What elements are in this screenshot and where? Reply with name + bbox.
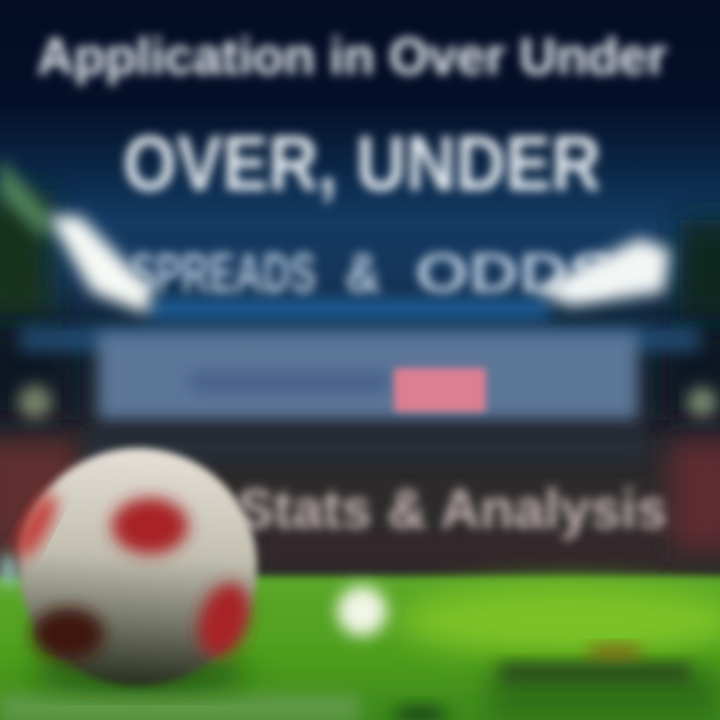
- small white ball: [337, 586, 387, 636]
- lower text: Stats & Analysis: [237, 477, 667, 540]
- heading: OVER, UNDER: [123, 119, 601, 207]
- pitch highlights: [0, 555, 720, 720]
- subtitle: ODDS: [415, 241, 615, 304]
- red highlighted box: [394, 368, 486, 412]
- central panel: [20, 326, 700, 420]
- dark strip below panel: [85, 432, 645, 462]
- subtitle: [130, 241, 615, 304]
- pitch: [0, 576, 720, 720]
- stadium light: right: [536, 238, 670, 306]
- blue band under subtitle: [150, 298, 550, 320]
- green light beam: [0, 158, 50, 240]
- subtitle: &: [345, 241, 381, 304]
- stadium light: left: [48, 216, 152, 314]
- crowd and side structures: [0, 190, 720, 563]
- subtitle: SPREADS: [130, 241, 316, 304]
- title: Application in Over Under: [37, 28, 667, 86]
- icon: soccer ball: [9, 448, 259, 688]
